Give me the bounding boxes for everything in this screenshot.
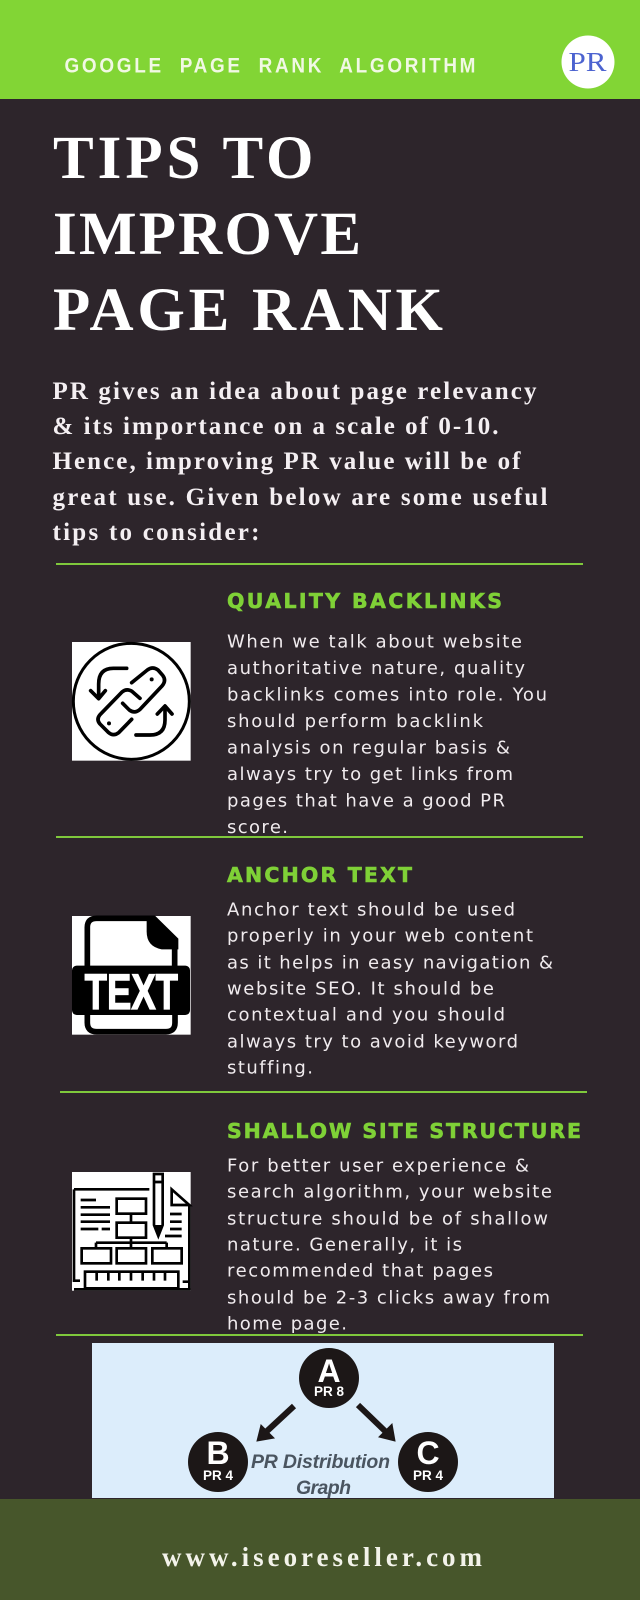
text block: always try to avoid keyword [227, 1032, 518, 1052]
text block: score. [227, 817, 288, 838]
text block: contextual and you should [227, 1004, 505, 1026]
node A: PR 8 [314, 1384, 344, 1399]
main title: IMPROVE [53, 201, 361, 268]
text block: home page. [227, 1314, 347, 1334]
node B: PR 4 [203, 1468, 233, 1483]
text block: recommended that pages [227, 1260, 493, 1282]
text block: stuffing. [227, 1058, 313, 1078]
chart: PR distribution graph [92, 1343, 554, 1499]
text block: website SEO. It should be [227, 978, 494, 1000]
text block [227, 632, 547, 838]
header title: GOOGLE PAGE RANK ALGORITHM [64, 54, 475, 78]
icon: PR badge: PR [568, 47, 606, 77]
text block: authoritative nature, quality [227, 658, 525, 679]
text block: structure should be of shallow [227, 1208, 548, 1230]
icon: PR badge [562, 36, 614, 88]
node B [188, 1432, 248, 1492]
heading: ANCHOR TEXT [227, 863, 412, 887]
node A [299, 1348, 359, 1408]
panel: anchor text [72, 863, 553, 1078]
intro paragraph: tips to consider: [52, 519, 260, 546]
header band [0, 0, 640, 99]
text block: always try to get links from [227, 764, 513, 785]
text block: When we talk about website [227, 632, 522, 652]
panel: quality backlinks [72, 589, 547, 838]
icon: text file: TEXT [85, 964, 178, 1020]
chart caption [251, 1451, 390, 1499]
arrow: A to B [257, 1406, 294, 1441]
icon: chain link with arrows [72, 642, 191, 761]
intro paragraph: great use. Given below are some useful [52, 484, 548, 511]
text block: should be 2-3 clicks away from [227, 1288, 550, 1308]
chart caption: PR Distribution [251, 1451, 390, 1473]
panel: shallow site structure [72, 1119, 581, 1334]
node C [398, 1432, 458, 1492]
arrow: A to C [358, 1405, 395, 1441]
text block: search algorithm, your website [227, 1182, 552, 1202]
main title [53, 125, 443, 344]
text block: nature. Generally, it is [227, 1234, 462, 1256]
icon: site structure blueprint [72, 1172, 191, 1291]
main title: TIPS TO [53, 125, 314, 192]
node C: PR 4 [413, 1468, 443, 1483]
text block: analysis on regular basis & [227, 738, 510, 758]
text block: as it helps in easy navigation & [227, 952, 553, 974]
footer url: www.iseoreseller.com [162, 1542, 482, 1572]
icon: text file [72, 916, 191, 1035]
text block [227, 900, 553, 1078]
text block: backlinks comes into role. You [227, 684, 547, 706]
node A: A [317, 1353, 341, 1389]
node C: C [416, 1435, 440, 1471]
footer band [0, 1499, 640, 1600]
heading: QUALITY BACKLINKS [227, 589, 502, 613]
intro paragraph: Hence, improving PR value will be of [52, 448, 521, 475]
heading: SHALLOW SITE STRUCTURE [227, 1119, 581, 1143]
text block: Anchor text should be used [227, 900, 515, 920]
intro paragraph: & its importance on a scale of 0-10. [52, 413, 498, 440]
text block: For better user experience & [227, 1156, 529, 1176]
chart caption: Graph [296, 1477, 351, 1499]
text block: should perform backlink [227, 711, 484, 732]
main title: PAGE RANK [53, 277, 443, 344]
text block: pages that have a good PR [227, 790, 505, 812]
intro paragraph: PR gives an idea about page relevancy [52, 378, 537, 405]
intro paragraph [52, 378, 548, 546]
text block [227, 1156, 552, 1334]
node B: B [206, 1435, 230, 1471]
text block: properly in your web content [227, 926, 533, 946]
